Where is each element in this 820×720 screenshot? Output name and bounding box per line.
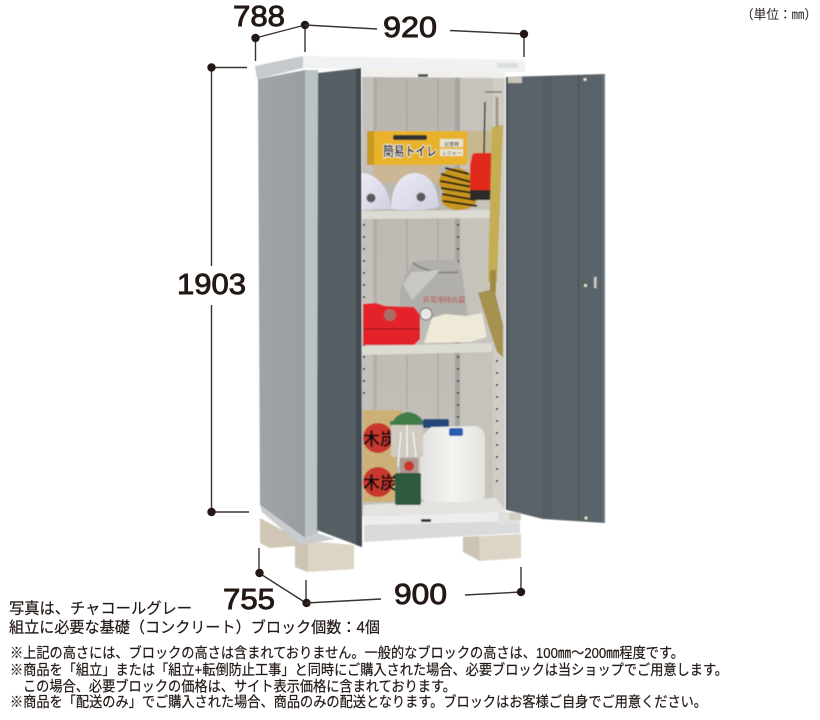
footnotes: この場合、必要ブロックの価格は、サイト表示価格に含まれております。 <box>23 678 456 696</box>
flashlight <box>470 102 492 200</box>
emergency toilet box: 簡易トイレ <box>383 144 437 159</box>
charcoal boxes: 木炭 <box>363 430 397 449</box>
dimension: top width 920 <box>305 12 528 57</box>
dimension: base depth 755 <box>223 548 311 616</box>
dimension: top depth 788: 788 <box>233 1 285 33</box>
dimension: top depth 788 <box>233 1 309 61</box>
caption: 組立に必要な基礎（コンクリート）ブロック個数：4個 <box>9 618 380 636</box>
rail holes <box>364 224 497 490</box>
charcoal boxes: 木炭 <box>363 474 397 493</box>
dimension: height 1903: 1903 <box>177 269 246 301</box>
rope coil <box>439 168 477 210</box>
dimension: base depth 755: 755 <box>223 584 275 616</box>
foundation blocks <box>260 518 521 572</box>
caption <box>9 600 380 636</box>
floor and door sill <box>363 498 520 542</box>
dimension: height 1903 <box>177 63 249 516</box>
emergency bag: 非常用持出袋 <box>423 295 465 304</box>
work gloves <box>424 313 487 343</box>
helmets <box>362 173 439 210</box>
red fuel can <box>363 303 432 345</box>
storage shed <box>255 56 605 572</box>
right door <box>506 74 605 523</box>
dimension: base width 900: 900 <box>394 579 447 611</box>
dimension: top width 920: 920 <box>383 12 437 44</box>
gas lantern <box>390 412 423 505</box>
caption: 写真は、チャコールグレー <box>9 600 192 618</box>
interior back wall <box>362 76 505 516</box>
middle shelf <box>362 343 492 355</box>
dimension: base width 900 <box>306 567 525 611</box>
upper shelf <box>362 210 491 219</box>
side wall <box>258 70 335 545</box>
water jug <box>420 419 485 502</box>
footnotes: ※商品を「組立」または「組立+転倒防止工事」と同時にご購入された場合、必要ブロックは当ショップでご用意します。 <box>10 661 728 679</box>
emergency bag <box>400 259 468 318</box>
unit label: （単位：㎜） <box>741 7 817 22</box>
roof <box>255 56 525 79</box>
footnotes: ※上記の高さには、ブロックの高さは含まれておりません。一般的なブロックの高さは、100㎜～200㎜程度です。 <box>10 644 684 662</box>
emergency toilet box: 災害時 <box>444 141 459 148</box>
emergency toilet box <box>367 131 492 183</box>
shovel <box>478 92 503 357</box>
footnotes: ※商品を「配送のみ」でご購入された場合、商品のみの配送となります。ブロックはお客様ご自身でご用意ください。 <box>10 693 707 711</box>
footnotes <box>10 644 728 711</box>
left door <box>317 68 362 547</box>
charcoal boxes <box>363 410 402 502</box>
emergency toilet box: レジャー <box>442 151 462 157</box>
